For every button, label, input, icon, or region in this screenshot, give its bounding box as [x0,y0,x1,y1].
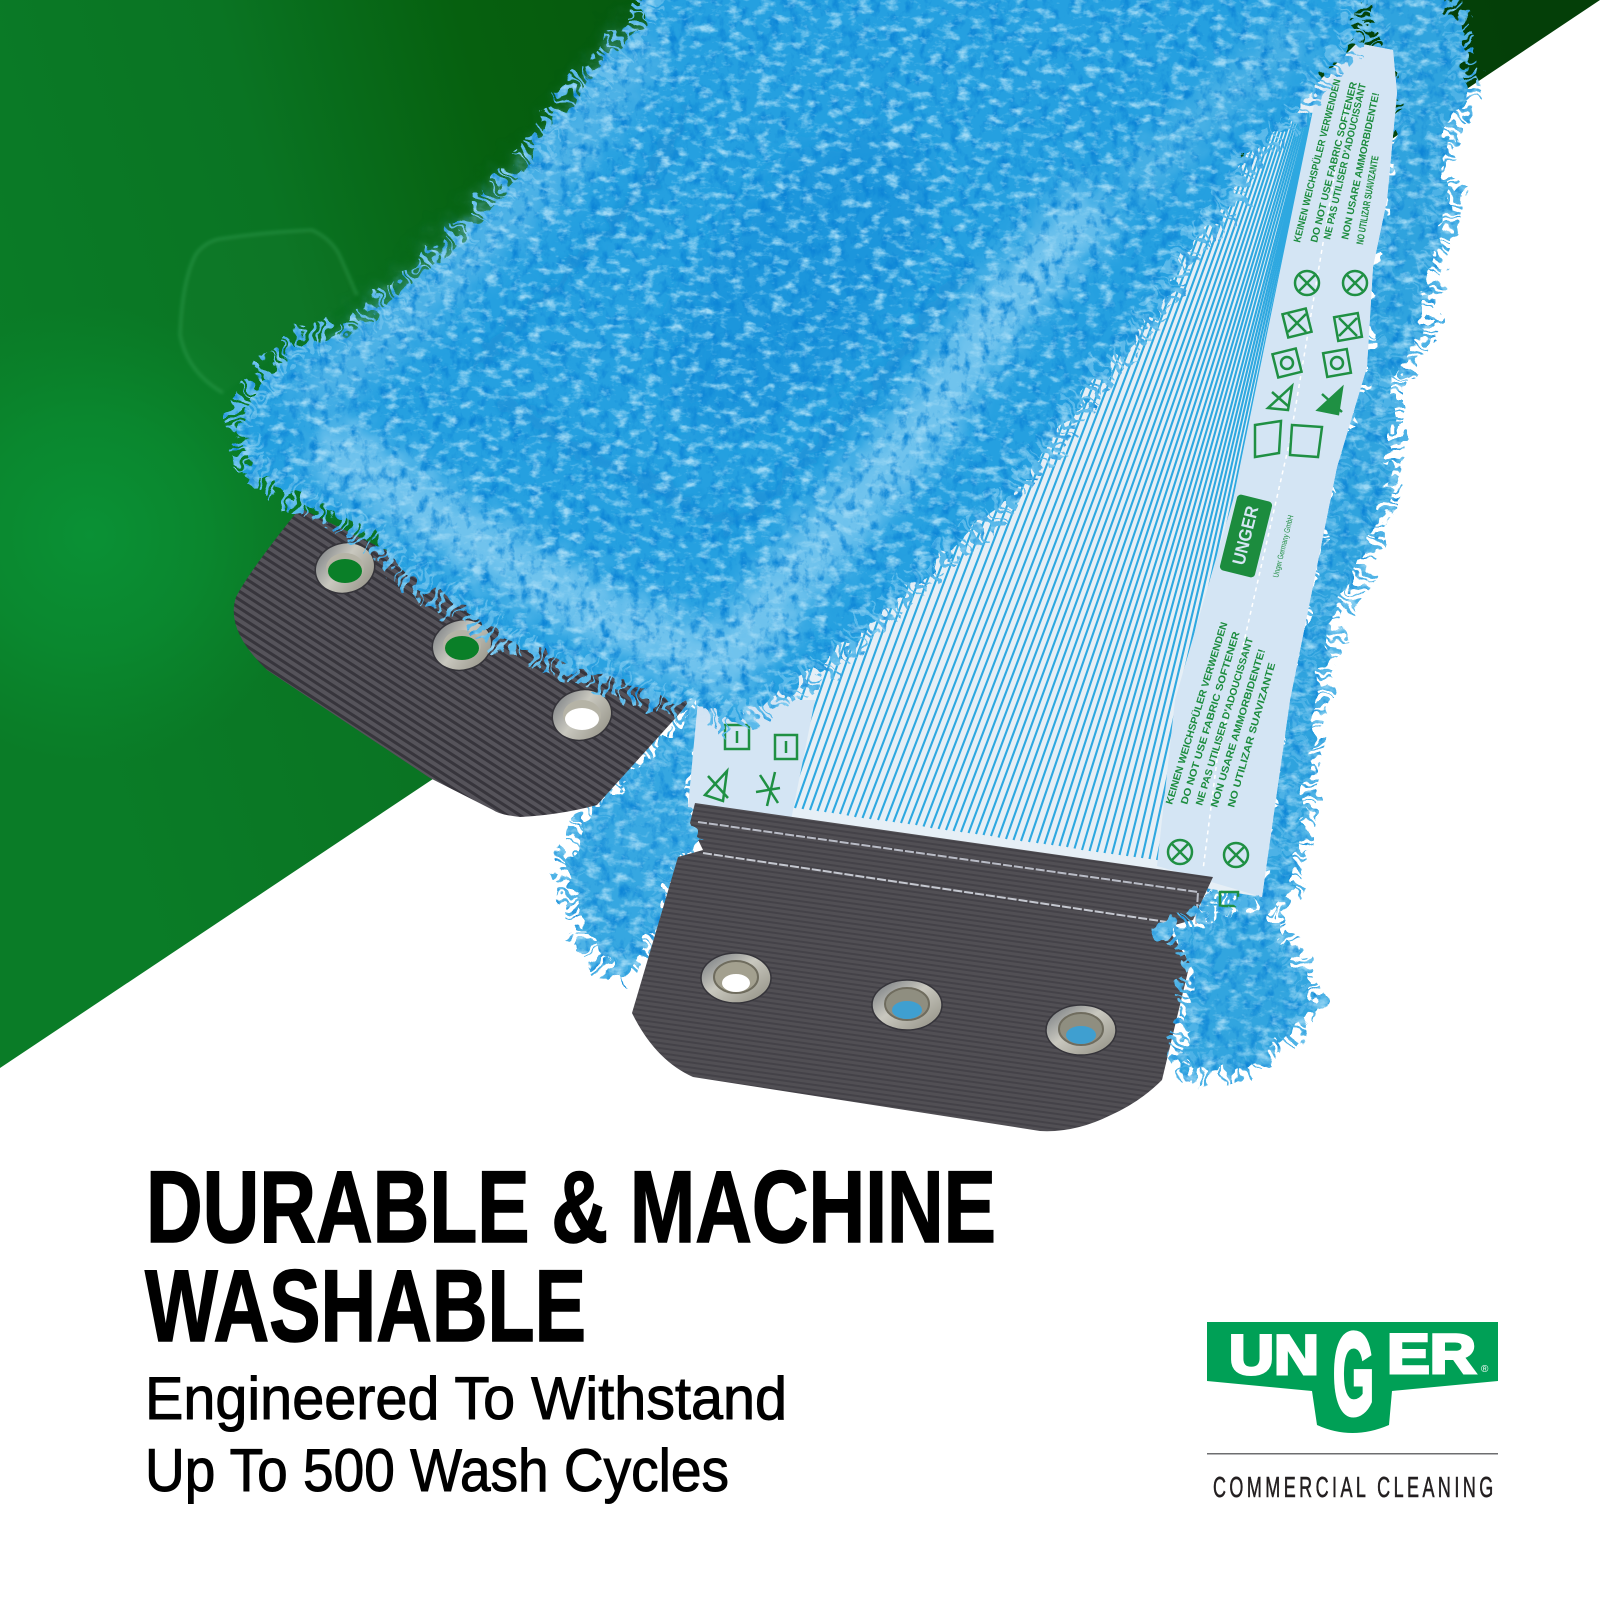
upper grey webbing tab [234,508,690,817]
heading: DURABLE & MACHINE [146,1150,996,1264]
label text lower: NE PAS UTILISER D'ADOUCISSANT [1194,636,1256,807]
Unger Commercial Cleaning logo [1207,1309,1498,1504]
label Unger mark [1219,494,1295,578]
logo divider [1207,1453,1498,1454]
label text upper: NO UTILIZAR SUAVIZANTE [1355,155,1382,246]
heading [145,1150,996,1363]
front grey webbing tab with stitching [632,803,1213,1131]
label text lower [1162,620,1278,809]
label Unger mark: UNGER [1228,504,1262,567]
striped underside fabric [688,43,1397,906]
subheading: Up To 500 Wash Cycles [145,1437,729,1504]
heading: WASHABLE [145,1249,586,1363]
logo wordmark [1229,1309,1476,1439]
logo wordmark: UN [1229,1323,1319,1386]
front fringe tufts at the tab corners [600,790,1312,1071]
care symbols [705,271,1367,906]
eyelet right [1046,1005,1116,1055]
main blue microfiber pad [240,0,1370,720]
label text upper: NE PAS UTILISER D'ADOUCISSANT [1322,82,1369,241]
eyelet one [310,536,380,600]
label text upper [1290,78,1382,246]
eyelet three [547,683,617,747]
label Unger mark: Unger Germany GmbH [1271,514,1295,578]
green diagonal background [0,0,1600,1068]
label text upper: DO NOT USE FABRIC SOFTENER [1309,80,1360,244]
label text lower: NO UTILIZAR SUAVIZANTE [1226,661,1278,809]
eyelet two [427,613,497,677]
label text lower: KEINEN WEICHSPÜLER VERWENDEN [1162,620,1230,806]
back fringe of the mop pad [565,0,1467,973]
subheading [145,1365,787,1504]
eyelet centre [872,980,942,1030]
label text lower: NON USARE AMMORBIDENTE! [1209,648,1268,809]
label text upper: KEINEN WEICHSPÜLER VERWENDEN [1290,78,1344,244]
logo badge [1207,1322,1498,1433]
microfiber mop product photo [234,0,1467,1131]
registered mark: ® [1481,1364,1489,1375]
logo wordmark: ER [1387,1322,1476,1385]
label text lower: DO NOT USE FABRIC SOFTENER [1179,630,1243,806]
subheading: Engineered To Withstand [145,1365,787,1432]
eyelet left [701,953,771,1003]
logo wordmark: G [1333,1309,1374,1439]
label text upper: NON USARE AMMORBIDENTE! [1340,92,1382,241]
woven care label band [688,43,1397,906]
logo tagline: COMMERCIAL CLEANING [1213,1472,1493,1504]
